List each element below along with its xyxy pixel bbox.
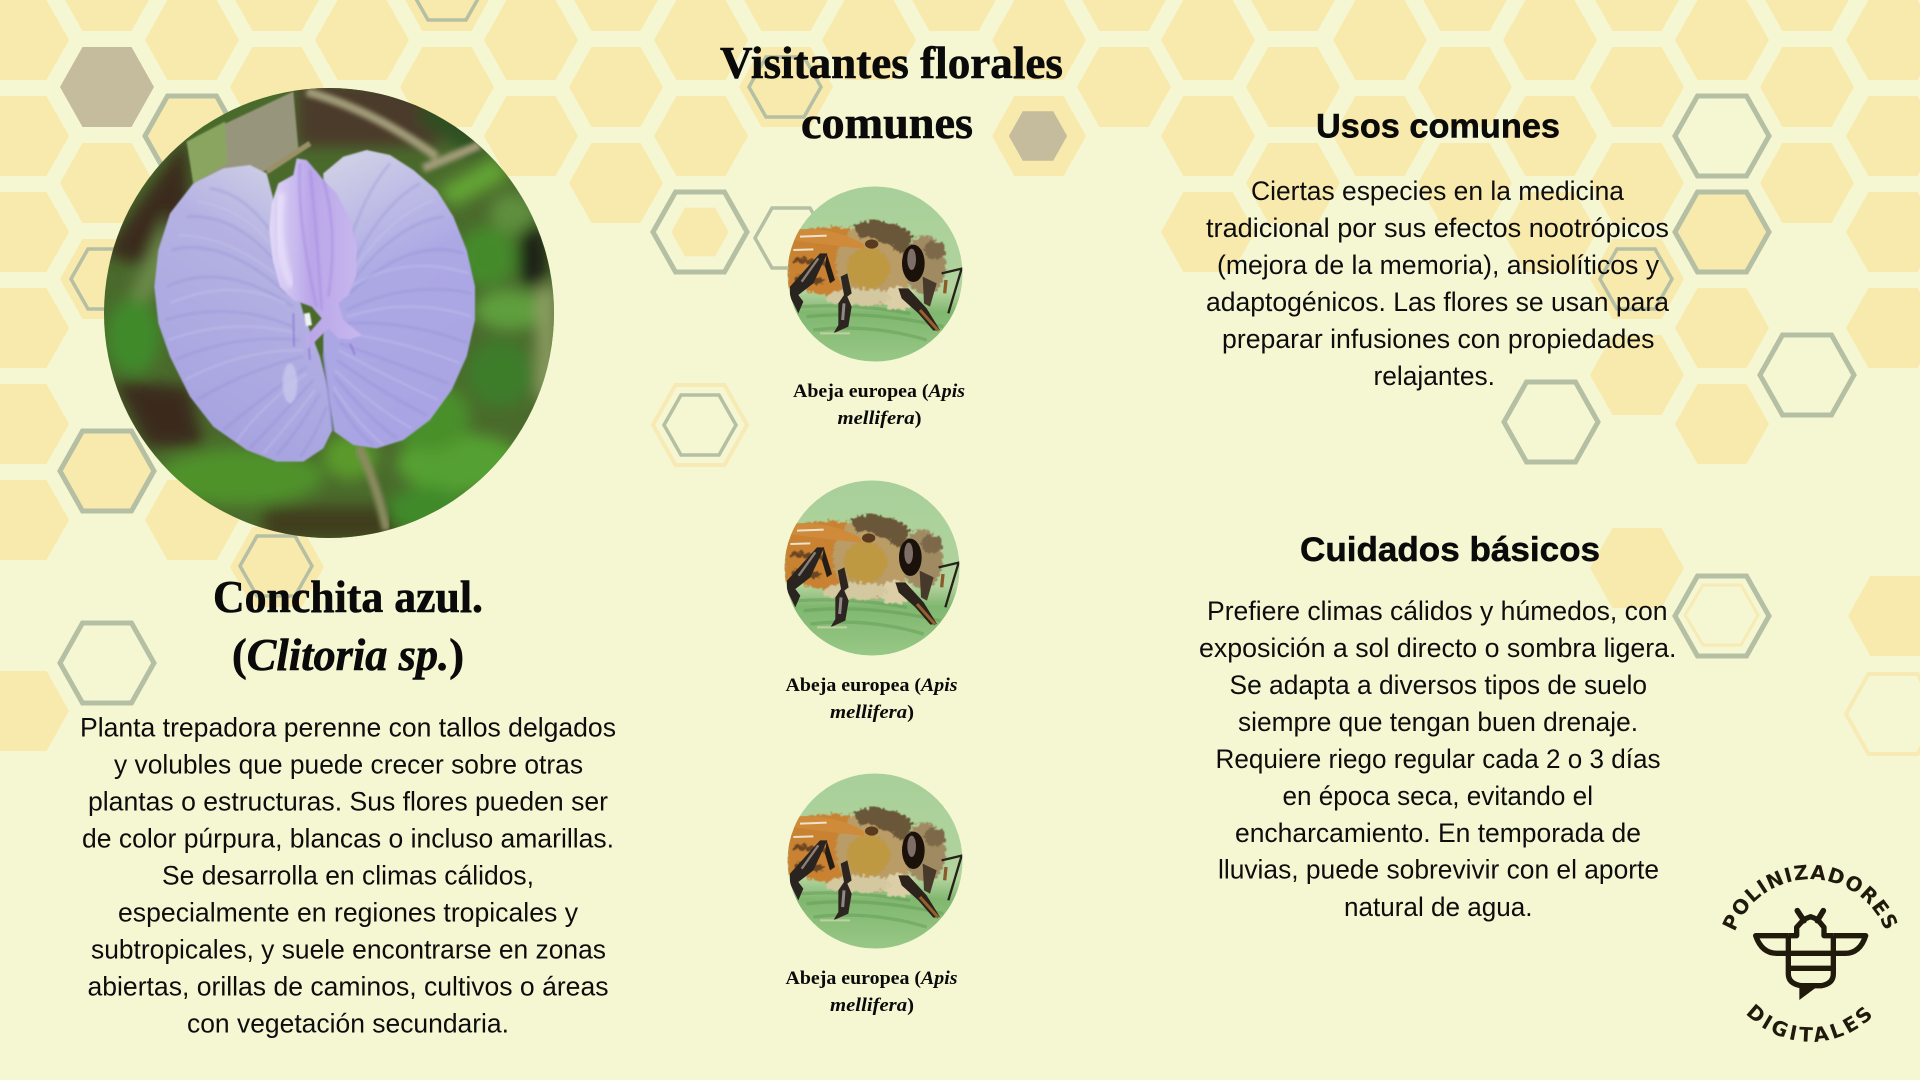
text block: basic care: Prefiere climas cálidos y húmedos, con [1207,596,1668,626]
text block: basic care: Requiere riego regular cada 2 o 3 días [1216,744,1660,774]
text block: plant description: abiertas, orillas de caminos, cultivos o áreas [88,972,608,1002]
heading: floral visitors [720,38,1063,148]
heading: common uses: Usos comunes [1316,108,1560,146]
heading: plant name: Conchita azul. [213,572,483,622]
caption: bee 2 [786,675,958,723]
text block: plant description: especialmente en regiones tropicales y [118,898,578,928]
logo: Polinizadores Digitales [1722,864,1898,1042]
flower photo blurred background [103,83,557,540]
text block: plant description: Se desarrolla en climas cálidos, [162,860,534,890]
photo: blue butterfly pea flower [100,83,560,545]
text block: basic care: Se adapta a diversos tipos de suelo [1230,670,1647,700]
text block: plant description: subtropicales, y suele encontrarse en zonas [91,934,606,964]
honeycomb pattern [0,0,1920,751]
photo: bee 2 [784,480,960,656]
heading: floral visitors: comunes [801,98,973,148]
heading: plant name: (Clitoria sp.) [232,630,464,680]
heading: plant name [213,572,483,680]
caption: bee 3 [786,968,958,1016]
heading: floral visitors: Visitantes florales [720,38,1063,88]
text block: basic care [1199,596,1676,922]
text block: basic care: lluvias, puede sobrevivir con el aporte [1218,854,1659,884]
text block: common uses: preparar infusiones con propiedades [1222,324,1654,354]
text block: basic care: exposición a sol directo o sombra ligera. [1199,633,1676,663]
logo: Polinizadores Digitales: DIGITALES [1746,1004,1871,1042]
text block: plant description: con vegetación secundaria. [187,1008,509,1038]
text block: basic care: natural de agua. [1344,892,1532,922]
text block: basic care: encharcamiento. En temporada de [1235,818,1641,848]
text block: common uses: Ciertas especies en la medicina [1251,176,1625,206]
caption: bee 2: Abeja europea ( Apis [786,675,958,696]
caption: bee 3: mellifera ) [830,995,914,1016]
text block: plant description: y volubles que puede crecer sobre otras [114,750,583,780]
petal veins [170,163,442,400]
right petal [323,150,475,448]
text block: plant description [80,712,616,1038]
caption: bee 2: mellifera ) [830,702,914,723]
text block: basic care: siempre que tengan buen drenaje. [1238,707,1638,737]
heading: basic care: Cuidados básicos [1300,531,1600,569]
text block: common uses: tradicional por sus efectos nootrópicos [1206,213,1669,243]
caption: bee 3: Abeja europea ( Apis [786,968,958,989]
caption: bee 1 [793,381,965,429]
text block: plant description: Planta trepadora perenne con tallos delgados [80,712,616,742]
outlined hexagon accents [60,0,1920,754]
caption: bee 1: mellifera ) [838,408,922,429]
text block: common uses: adaptogénicos. Las flores se usan para [1206,287,1670,317]
text block: basic care: en época seca, evitando el [1282,781,1593,811]
text block: plant description: de color púrpura, blancas o incluso amarillas. [82,824,614,854]
text block: common uses [1206,176,1670,391]
text block: common uses: relajantes. [1374,361,1495,391]
caption: bee 1: Abeja europea ( Apis [793,381,965,402]
logo: Polinizadores Digitales: POLINIZADORES [1722,864,1898,930]
flower keel [269,158,362,350]
left petal [154,165,332,462]
photo: bee 3 [787,773,963,949]
text block: common uses: (mejora de la memoria), ansiolíticos y [1217,250,1659,280]
text block: plant description: plantas o estructuras. Sus flores pueden ser [88,786,608,816]
photo: bee 1 [787,186,963,362]
